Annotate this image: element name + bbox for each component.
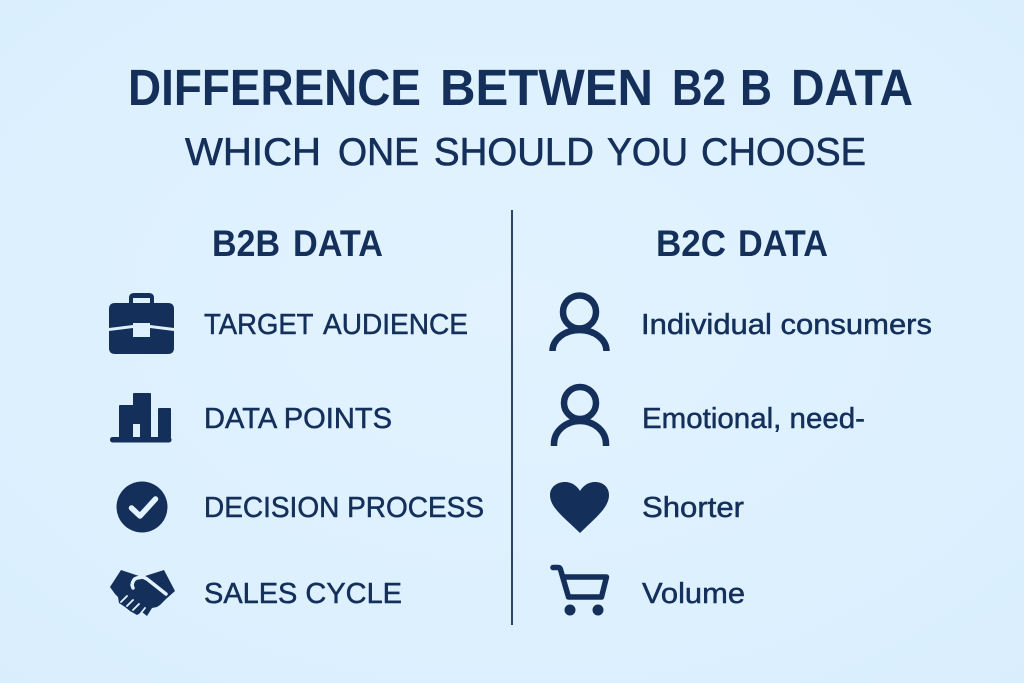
label: sales cycle: SALES CYCLE: [204, 578, 402, 610]
subtitle: CHOOSE: [701, 131, 866, 174]
label: decision process: DECISION PROCESS: [204, 492, 484, 524]
label: target audience: AUDIENCE: [323, 309, 468, 341]
subtitle: ONE: [338, 131, 419, 174]
label: target audience: TARGET: [204, 309, 314, 341]
icon: bar chart: [110, 393, 172, 442]
subtitle: SHOULD: [434, 131, 594, 174]
heading: B2B data: DATA: [293, 223, 383, 264]
panel: B2C data: [550, 223, 932, 616]
label: emotional, need-: Emotional, need-: [642, 403, 865, 435]
icon: person: [552, 296, 606, 351]
subtitle: WHICH: [185, 131, 321, 174]
label: shorter: Shorter: [642, 492, 744, 524]
icon: check circle: [116, 482, 168, 532]
title: DATA: [791, 59, 913, 116]
subtitle: YOU: [607, 131, 688, 174]
heading: B2C data: B2C: [656, 223, 726, 264]
heading: B2C data: DATA: [738, 223, 828, 264]
title: BETWEN: [440, 59, 653, 116]
label: volume: Volume: [642, 578, 745, 610]
icon: briefcase: [109, 293, 174, 354]
icon: person: [554, 387, 606, 446]
panel: B2B data: [109, 223, 484, 616]
icon: heart: [550, 482, 609, 533]
title: B: [740, 59, 772, 116]
title: B2: [672, 59, 726, 116]
label: data points: DATA POINTS: [204, 403, 392, 435]
heading: B2B data: B2B: [212, 223, 280, 264]
title: DIFFERENCE: [128, 59, 421, 116]
label: individual consumers: Individual consumers: [641, 309, 932, 341]
column divider: [511, 210, 513, 625]
icon: handshake: [110, 570, 175, 616]
icon: shopping cart: [553, 568, 606, 616]
